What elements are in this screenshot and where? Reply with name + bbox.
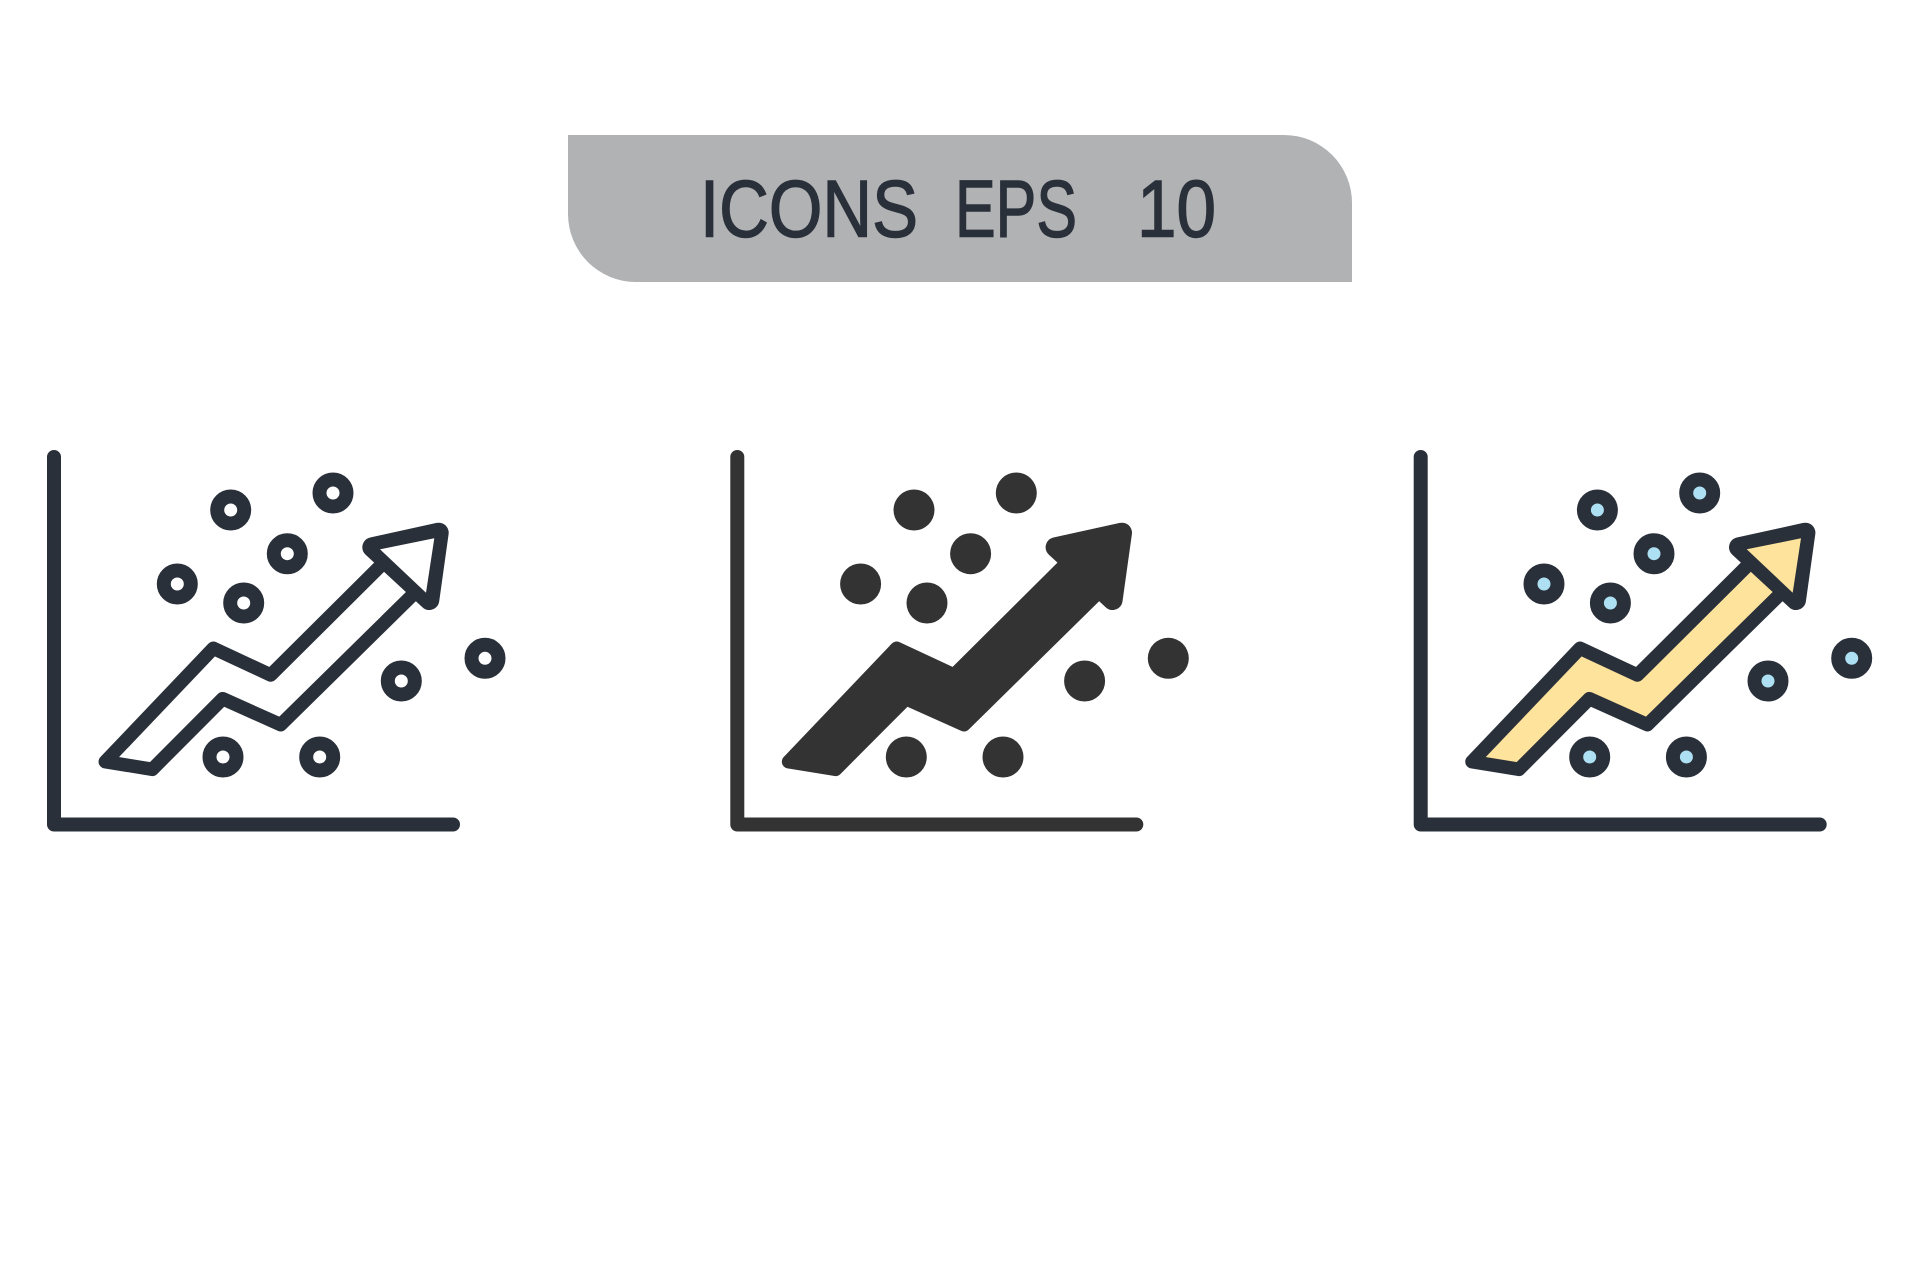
arrow head fill: [1747, 538, 1801, 593]
banner title: [700, 164, 1216, 254]
arrow head opening: [380, 538, 434, 593]
data point dots: [164, 480, 499, 770]
data point dots blue: [1530, 480, 1865, 770]
rising arrow yellow: [1472, 533, 1805, 769]
chart axes: [54, 457, 453, 824]
banner background: [568, 135, 1352, 282]
arrow head: [1739, 533, 1805, 600]
arrow shaft: [789, 562, 1112, 769]
arrow head: [1056, 533, 1122, 600]
icon: solid style chart with arrow: [737, 457, 1189, 824]
icon: outline style chart with arrow: [54, 457, 498, 824]
data point dots: [840, 472, 1189, 778]
banner: icons eps 10: [568, 135, 1352, 282]
arrow shaft: [105, 562, 429, 769]
arrow shaft: [1472, 562, 1796, 769]
chart axes: [737, 457, 1136, 824]
banner title: EPS: [955, 164, 1077, 254]
banner title: 10: [1137, 164, 1216, 254]
rising arrow solid: [789, 533, 1122, 769]
icon: colored style chart with arrow: [1421, 457, 1865, 824]
chart axes: [1421, 457, 1820, 824]
rising arrow outline: [105, 533, 439, 769]
arrow head: [372, 533, 439, 600]
banner title: ICONS: [700, 164, 918, 254]
